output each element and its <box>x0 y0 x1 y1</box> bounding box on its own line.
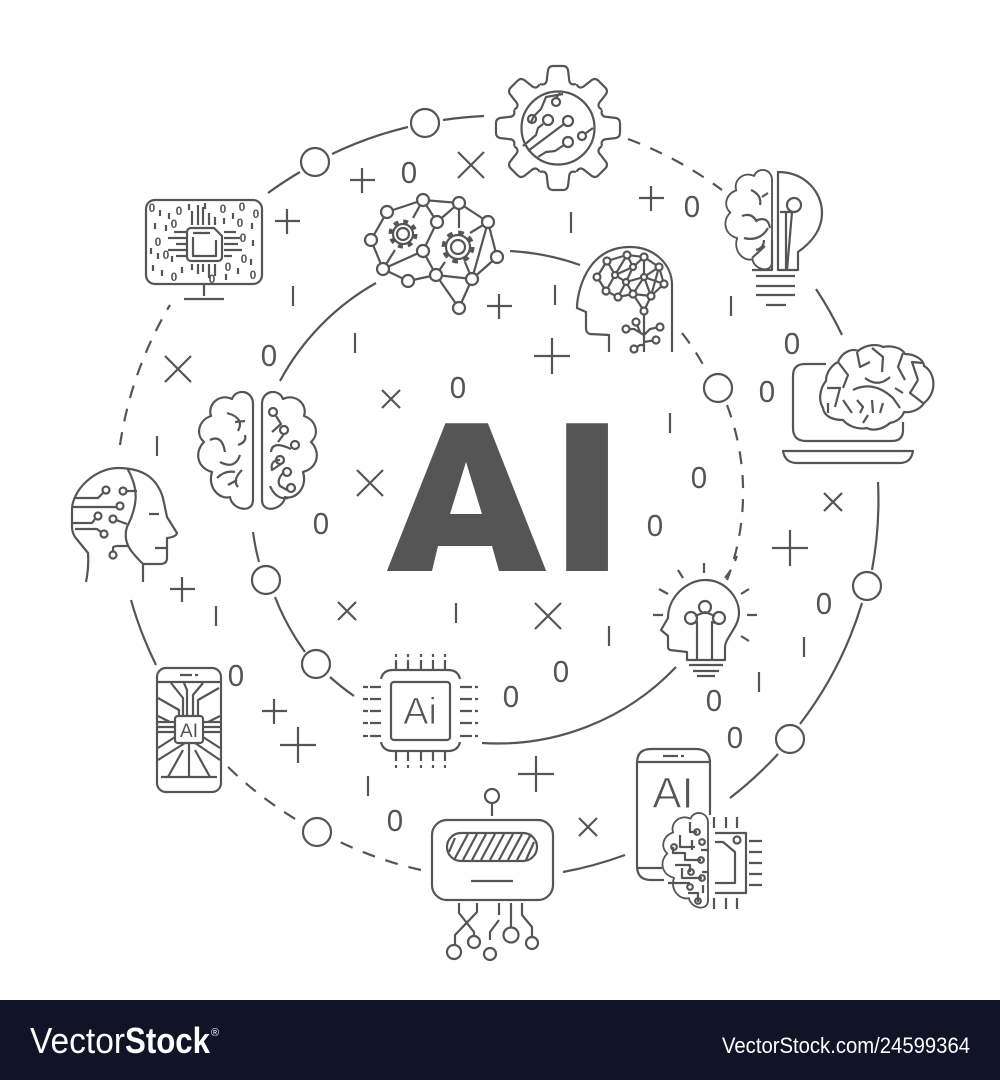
title: AI: A <box>386 381 547 612</box>
icon: laptop with brain <box>783 345 933 463</box>
monitor binary digits: 0 <box>250 268 257 282</box>
binary zeros: 0 <box>450 371 466 405</box>
binary zeros: 0 <box>261 339 277 373</box>
icon: monitor with chip and binary <box>146 200 262 299</box>
footer logo <box>30 1020 219 1061</box>
binary zeros: 0 <box>691 461 707 495</box>
monitor binary digits: 0 <box>240 231 247 245</box>
binary zeros: 0 <box>228 659 244 693</box>
monitor binary digits: 0 <box>220 202 227 216</box>
footer logo: ® <box>211 1027 219 1039</box>
title: AI: I <box>554 381 621 612</box>
plus signs <box>170 168 808 792</box>
binary zeros: 0 <box>553 655 569 689</box>
monitor binary digits: 0 <box>209 272 216 286</box>
binary zeros: 0 <box>706 684 722 718</box>
monitor binary digits: 0 <box>176 204 183 218</box>
binary zeros: 0 <box>759 375 775 409</box>
footer bar <box>0 1000 1000 1080</box>
footer logo: Stock <box>125 1020 211 1061</box>
binary zeros: 0 <box>313 507 329 541</box>
icon: phone with brain and chip: AI <box>652 769 694 818</box>
icon: AI processor chip <box>363 654 478 768</box>
icon: lightbulb head <box>653 556 757 676</box>
binary zeros: 0 <box>387 804 403 838</box>
binary ones <box>157 212 804 796</box>
small gear <box>391 222 415 246</box>
binary zeros: 0 <box>503 680 519 714</box>
inner ring <box>252 251 743 744</box>
icon: phone with AI chip <box>157 668 221 792</box>
monitor binary digits <box>149 200 260 286</box>
binary zeros: 0 <box>727 721 743 755</box>
footer image id: VectorStock.com/24599364 <box>722 1033 970 1058</box>
icon: circuit gear <box>496 66 620 190</box>
icon: head with neural network <box>577 247 672 352</box>
outer ring <box>120 109 881 872</box>
icon: digital head profile <box>72 468 177 582</box>
icon: phone with AI chip: AI <box>180 721 198 742</box>
icon: brain with circuit right half <box>198 392 317 509</box>
large gear <box>444 233 472 261</box>
monitor binary digits: 0 <box>241 252 248 266</box>
binary zeros: 0 <box>647 509 663 543</box>
monitor binary digits: 0 <box>253 207 260 221</box>
title: AI <box>386 381 621 612</box>
monitor binary digits: 0 <box>155 235 162 249</box>
monitor binary digits: 0 <box>239 200 246 214</box>
monitor binary digits: 0 <box>171 270 178 284</box>
binary zeros: 0 <box>684 190 700 224</box>
icon: lightbulb half brain <box>725 170 822 305</box>
monitor binary digits: 0 <box>163 248 170 262</box>
footer logo: Vector <box>30 1020 125 1061</box>
icon: robot with circuit wires <box>432 789 553 960</box>
icon: neural network brain with gears <box>365 194 503 314</box>
binary zeros <box>228 156 832 838</box>
monitor binary digits: 0 <box>237 216 244 230</box>
binary zeros: 0 <box>816 587 832 621</box>
monitor binary digits: 0 <box>171 217 178 231</box>
cross signs <box>165 152 842 836</box>
monitor binary digits: 0 <box>225 260 232 274</box>
icon: phone with brain and chip <box>637 749 762 909</box>
icon: AI processor chip: Ai <box>403 691 437 733</box>
binary zeros: 0 <box>401 156 417 190</box>
binary zeros: 0 <box>784 327 800 361</box>
monitor binary digits: 0 <box>149 201 156 215</box>
